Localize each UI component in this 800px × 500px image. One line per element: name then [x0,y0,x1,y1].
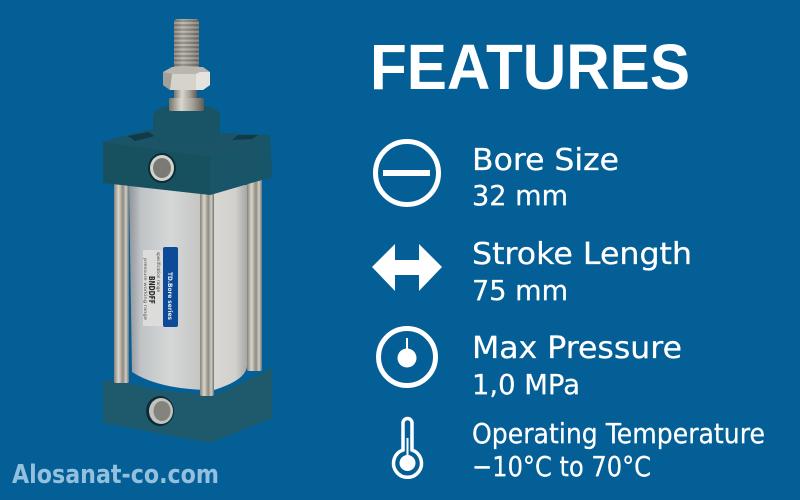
product label [143,247,178,327]
title: FEATURES [370,31,690,103]
product label: pressure working range [143,258,148,321]
hex nut [163,67,210,90]
tie rods [114,178,262,383]
top end cap [103,130,272,195]
top port hole [148,153,176,183]
icon: pressure gauge [378,328,436,386]
piston neck [174,90,197,100]
watermark: Alosanat-co.com [12,460,219,490]
lower rod ends [114,362,262,396]
feature: operating temperature [394,417,765,483]
feature: stroke length [372,237,692,307]
aluminium cylinder body [129,185,247,390]
product label: TD.Bore series [166,272,173,320]
bore size label: Bore Size [472,143,619,178]
collar [169,98,204,111]
operating temperature label: Operating Temperature [472,417,765,450]
max pressure label: Max Pressure [472,331,682,366]
feature: max pressure [378,328,682,401]
pneumatic cylinder photo [103,19,272,443]
stroke length value: 75 mm [472,275,568,307]
stroke length label: Stroke Length [472,237,692,272]
icon: double arrow [372,244,442,291]
operating temperature value: −10°C to 70°C [472,451,651,483]
bore size value: 32 mm [472,180,568,212]
cylinder rod thread [174,19,199,70]
middle tie rod [200,190,214,396]
max pressure value: 1,0 MPa [472,369,580,401]
feature: bore size [376,142,619,212]
product label: specification range [156,252,161,293]
icon: thermometer [394,418,422,477]
icon: bore circle [376,142,438,204]
bottom port hole [146,396,174,426]
boss on end cap [153,106,220,145]
bottom end cap [103,368,272,443]
product label: BNDDFF [147,276,156,304]
